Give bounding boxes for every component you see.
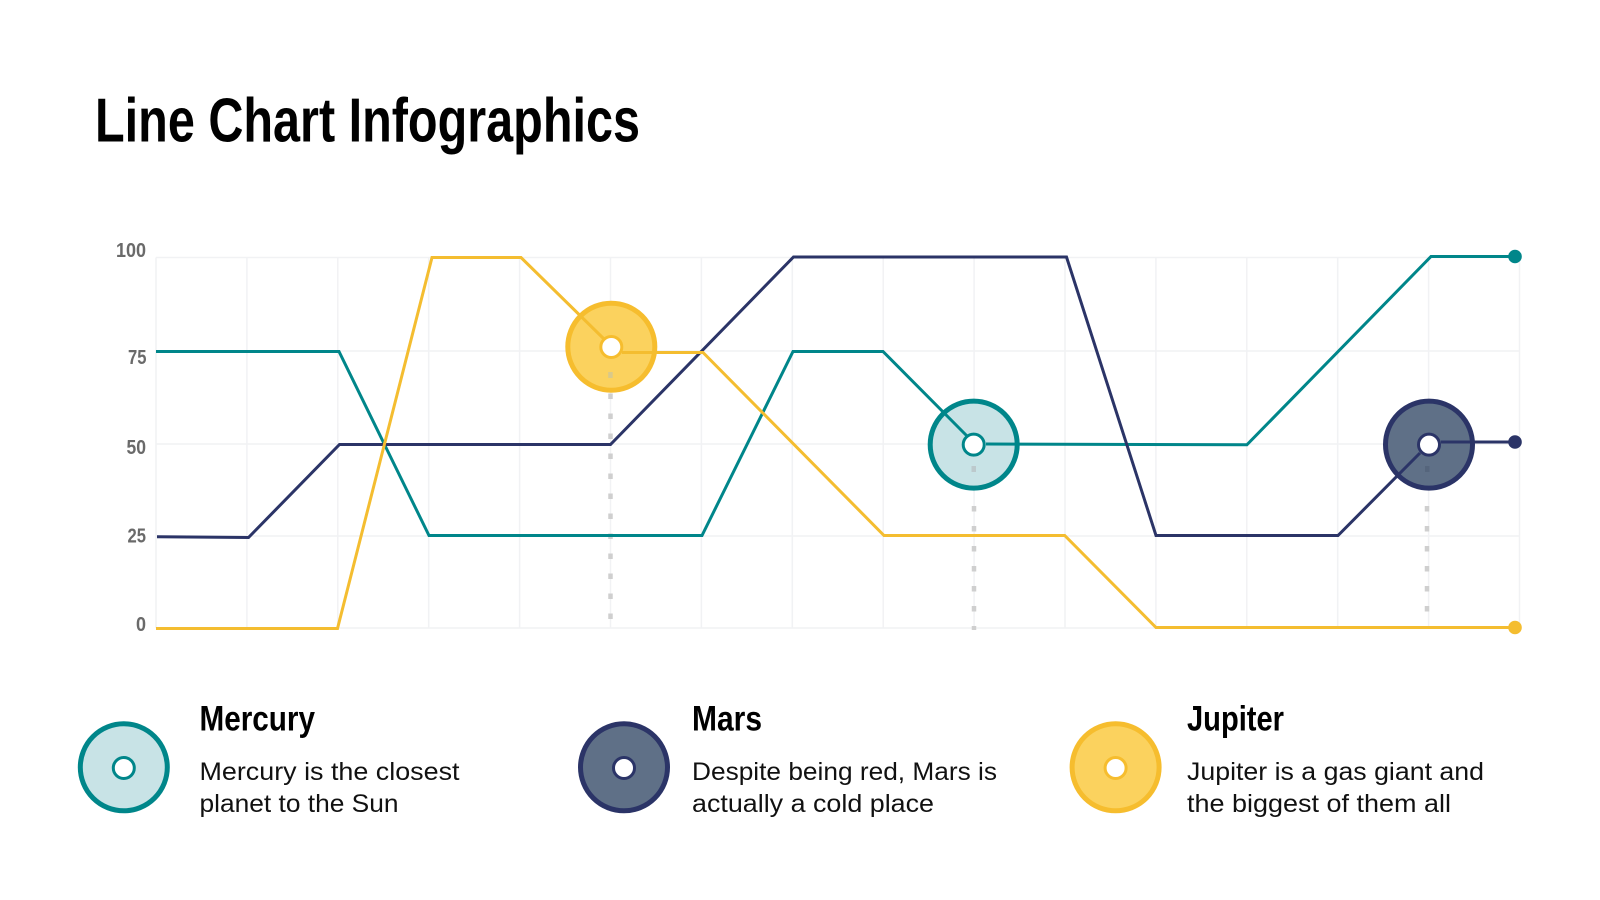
text: Jupiter description: the biggest of them all [1187, 790, 1451, 818]
y axis labels: 25 [128, 526, 146, 548]
line chart [116, 240, 1522, 636]
heading: Mars: Mars [692, 700, 762, 738]
series: Jupiter [156, 258, 1522, 634]
legend: Mars [580, 700, 1004, 818]
end dot: Jupiter [1508, 621, 1522, 634]
text: Jupiter description: Jupiter is a gas giant and [1187, 758, 1484, 786]
legend: Mercury [80, 700, 466, 818]
icon: Jupiter disc [1072, 724, 1159, 811]
series: Mercury [156, 250, 1522, 535]
icon: Mercury disc [80, 724, 167, 811]
end dot: Mars [1508, 435, 1522, 449]
marker centres [601, 336, 1440, 455]
marker disc: Jupiter [568, 303, 655, 390]
text: Mars description: actually a cold place [692, 790, 934, 818]
y axis labels: 75 [128, 347, 146, 369]
heading: Mercury: Mercury [200, 700, 315, 738]
series: Mars [157, 257, 1522, 538]
text: Mars description: Despite being red, Mars is [692, 758, 997, 786]
legend: Jupiter [1072, 700, 1491, 818]
y axis labels: 100 [116, 240, 146, 262]
heading: Jupiter: Jupiter [1187, 700, 1284, 738]
dotted guide lines [610, 394, 1427, 630]
marker disc: Mars [1386, 401, 1472, 488]
y axis labels: 0 [136, 614, 146, 636]
title: Line Chart Infographics [95, 86, 640, 156]
y axis labels: 50 [126, 437, 146, 459]
marker disc: Mercury [930, 401, 1017, 488]
end dot: Mercury [1508, 250, 1522, 263]
text: Mercury description: Mercury is the closest [200, 758, 460, 786]
y axis labels [116, 240, 146, 636]
icon: Mars disc [580, 724, 668, 811]
text: Mercury description: planet to the Sun [200, 790, 398, 818]
